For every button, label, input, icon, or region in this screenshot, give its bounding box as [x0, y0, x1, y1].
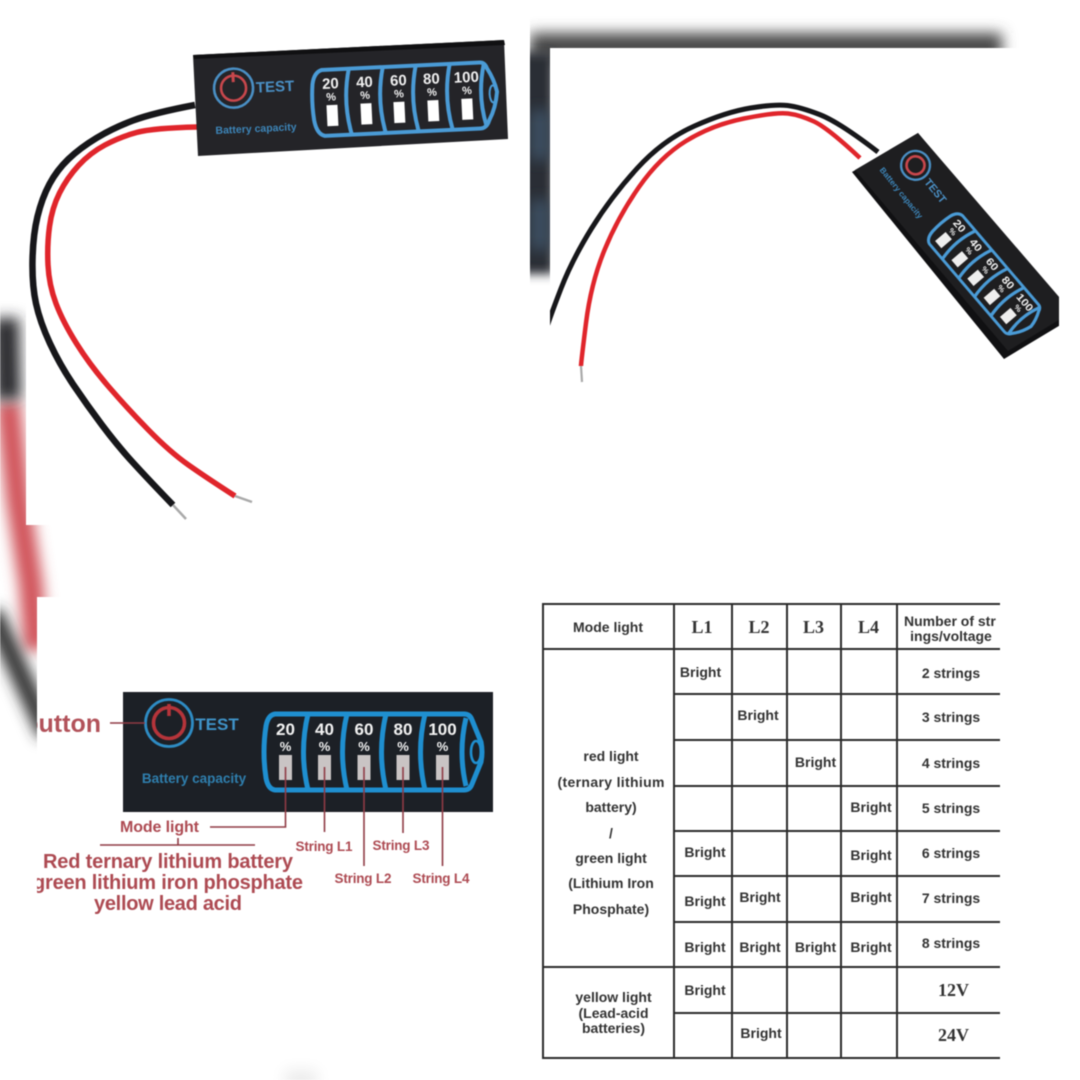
mode column: red and green light: (ternary lithium	[558, 774, 664, 790]
label: test: TEST	[195, 715, 239, 734]
percent labels: 60	[983, 256, 1000, 273]
mode column: red and green light: (Lithium Iron	[568, 875, 654, 891]
icon: power button	[146, 700, 192, 746]
callout: battery type legend: green lithium iron phosphate	[33, 872, 303, 894]
black wire	[546, 105, 878, 330]
red wire	[581, 113, 860, 382]
bright cells: Bright	[850, 799, 892, 815]
panel: mode light table	[542, 603, 1000, 1059]
callout: mode light: Mode light	[120, 819, 200, 836]
bright cells: Bright	[739, 889, 781, 905]
percent labels: 20	[950, 218, 968, 235]
strings and voltage column: 7 strings	[922, 890, 980, 906]
callout: battery type legend	[33, 851, 303, 915]
percent labels: %	[947, 226, 958, 237]
device body	[852, 133, 1072, 359]
percent labels	[948, 219, 1034, 313]
device face labels	[213, 56, 499, 141]
callout: string labels: String L1	[296, 839, 353, 854]
bright cells: Bright	[739, 939, 781, 955]
mode column: yellow light: (Lead-acid	[578, 1005, 649, 1021]
percent labels: 100	[1014, 292, 1035, 314]
percent labels: %	[462, 85, 472, 97]
percent labels: %	[427, 87, 437, 99]
percent labels	[276, 722, 457, 752]
bright cells: Bright	[684, 939, 726, 955]
bright cells: Bright	[684, 982, 726, 998]
percent labels: %	[319, 739, 331, 754]
percent labels: 60	[355, 720, 373, 739]
percent labels: 40	[315, 720, 334, 739]
table header: L1	[691, 617, 713, 637]
mode column: red and green light: /	[609, 825, 613, 841]
mode column: red and green light	[558, 748, 664, 917]
callout: string labels: String L2	[334, 871, 392, 886]
label: battery capacity: Battery capacity	[215, 121, 297, 137]
percent labels: 80	[999, 275, 1016, 292]
strings and voltage column: 12V	[938, 980, 969, 1000]
mode column: red and green light: battery)	[585, 799, 637, 815]
strings and voltage column: 6 strings	[922, 845, 980, 861]
callout: button: button	[23, 710, 101, 738]
callout lines	[100, 723, 442, 866]
strings and voltage column	[922, 665, 980, 1045]
bright cells: Bright	[795, 754, 836, 770]
icon: power button	[899, 149, 932, 182]
table header: Mode light	[573, 619, 643, 635]
bright cells: Bright	[850, 847, 892, 863]
panel: product photo, angled view	[546, 48, 1072, 408]
percent labels: %	[397, 739, 409, 754]
label: battery capacity: Battery capacity	[878, 166, 925, 221]
bright cells: Bright	[740, 1025, 782, 1041]
label: test: TEST	[256, 78, 295, 97]
mode column: yellow light: yellow light	[575, 989, 652, 1005]
table header: L3	[803, 617, 824, 637]
percent labels: 100	[453, 69, 479, 87]
bright cells	[680, 664, 892, 1041]
panel: product photo, front view	[26, 0, 530, 525]
percent labels: %	[437, 739, 449, 754]
mode column: red and green light: Phosphate)	[573, 901, 649, 917]
bright cells: Bright	[850, 889, 892, 905]
table header: ings/voltage	[910, 628, 992, 644]
battery graphic	[926, 212, 1042, 336]
callout: battery type legend: Red ternary lithium battery	[43, 851, 294, 873]
strings and voltage column: 24V	[938, 1025, 969, 1045]
percent labels: 40	[356, 74, 373, 91]
label: test: TEST	[921, 177, 949, 206]
panel: annotated indicator diagram	[36, 596, 494, 915]
table grid	[542, 603, 1000, 1059]
dark indicator board	[123, 692, 493, 812]
icon: power button	[213, 68, 254, 109]
percent labels: 40	[967, 237, 984, 254]
mode column: red and green light: green light	[575, 850, 647, 866]
table header	[573, 613, 996, 644]
table header: L4	[858, 617, 879, 637]
bright cells: Bright	[684, 893, 726, 909]
mode column: yellow light: batteries)	[582, 1020, 645, 1036]
percent labels: %	[1012, 303, 1024, 314]
percent labels: 80	[423, 70, 440, 88]
percent labels	[322, 69, 480, 104]
label: battery capacity: Battery capacity	[142, 771, 247, 786]
percent labels: %	[358, 739, 370, 754]
indicator lights	[279, 755, 449, 780]
bright cells: Bright	[737, 707, 779, 723]
indicator lights	[326, 98, 473, 126]
table header: L2	[748, 617, 770, 637]
bright cells: Bright	[850, 939, 892, 955]
percent labels: %	[980, 265, 991, 276]
callout: battery type legend: yellow lead acid	[94, 893, 242, 915]
strings and voltage column: 2 strings	[922, 665, 980, 681]
bright cells: Bright	[680, 664, 721, 680]
battery outline	[311, 62, 499, 136]
percent labels: 60	[390, 72, 407, 90]
strings and voltage column: 3 strings	[922, 709, 980, 725]
percent labels: 20	[322, 75, 339, 93]
table header: Number of str	[904, 613, 996, 629]
percent labels: %	[963, 245, 975, 257]
mode column: yellow light	[575, 989, 652, 1036]
percent labels: 80	[394, 720, 412, 739]
percent labels: %	[996, 283, 1007, 294]
indicator lights	[935, 232, 1017, 324]
bright cells: Bright	[684, 844, 726, 860]
device face labels	[879, 149, 948, 219]
callout: string labels: String L3	[372, 838, 430, 853]
percent labels: %	[326, 91, 336, 104]
strings and voltage column: 8 strings	[922, 935, 980, 951]
percent labels: 20	[276, 720, 295, 739]
device body	[193, 40, 508, 156]
mode column: red and green light: red light	[583, 748, 639, 764]
strings and voltage column: 4 strings	[922, 755, 980, 771]
black wire	[32, 105, 195, 519]
callout: string labels: String L4	[412, 871, 470, 886]
bright cells: Bright	[795, 939, 836, 955]
percent labels: %	[360, 90, 370, 102]
battery outline	[926, 212, 1042, 336]
percent labels: 100	[428, 720, 457, 739]
red wire	[48, 127, 252, 502]
percent labels: %	[280, 739, 292, 754]
strings and voltage column: 5 strings	[922, 800, 980, 816]
callout: string labels	[296, 838, 470, 886]
battery outline	[264, 714, 482, 790]
percent labels: %	[394, 88, 404, 101]
